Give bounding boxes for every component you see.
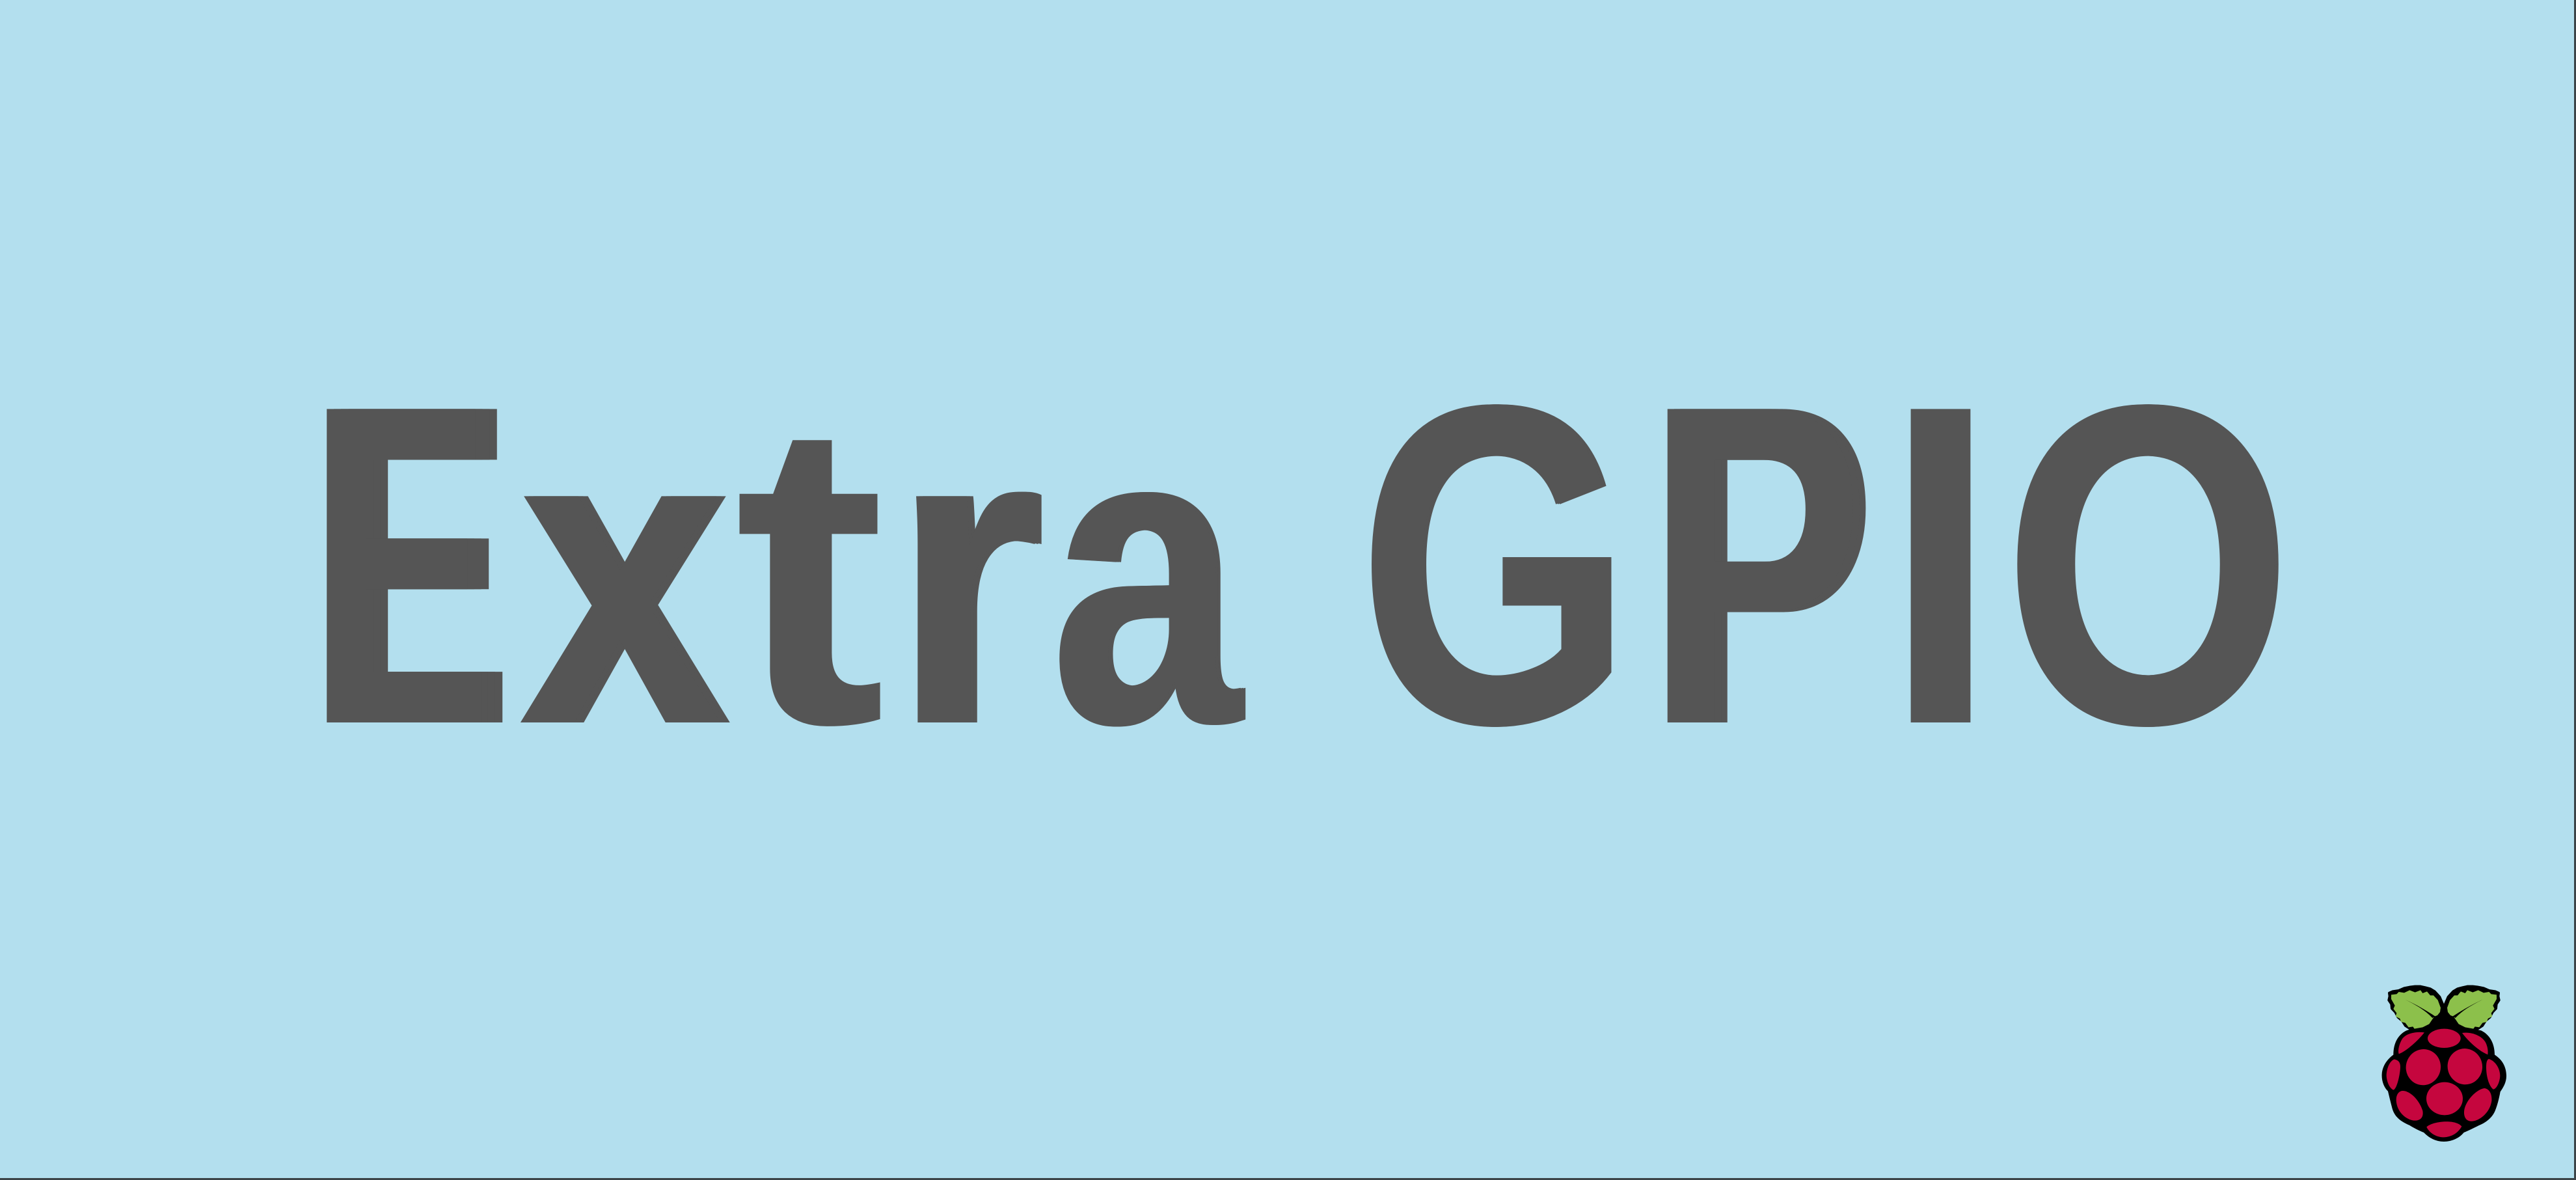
icon part: left leaf [2389, 987, 2444, 1029]
title: E [308, 310, 492, 819]
icon: raspberry logo [2381, 985, 2506, 1142]
title: O [2002, 310, 2290, 819]
title: t [734, 331, 886, 815]
title: x [518, 335, 723, 814]
title: I [1883, 310, 1998, 819]
icon part: right leaf [2444, 987, 2499, 1029]
title [308, 310, 2290, 819]
title: P [1646, 310, 1864, 819]
title: G [1357, 310, 1629, 819]
title: r [891, 335, 1040, 814]
icon part: berry outline [2382, 1022, 2506, 1142]
title: a [1050, 335, 1238, 814]
icon part: berry drupelets [2387, 1029, 2500, 1137]
